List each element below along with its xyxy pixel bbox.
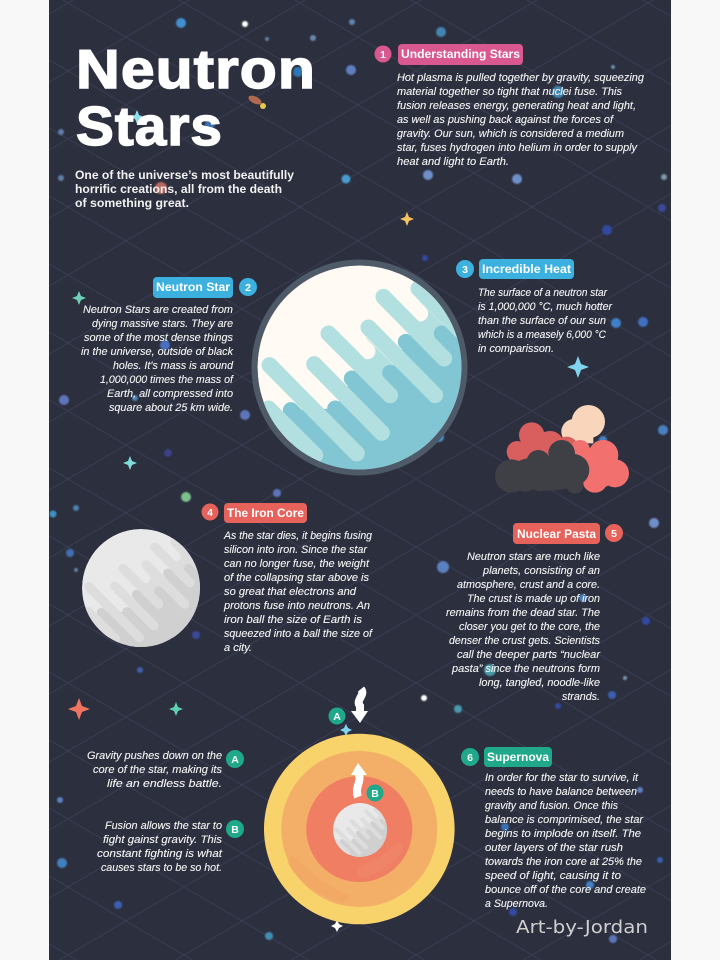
text block: fusion releases energy, generating heat and light, [397,100,636,112]
text block: long, tangled, noodle-like [479,677,600,689]
text block: in the universe, outside of black [81,346,233,358]
text block: Hot plasma is pulled together by gravity, squeezing [397,72,645,84]
text block: The crust is made up of iron [467,593,600,605]
text block: as well as pushing back against the forces of [397,114,614,126]
text block [81,304,234,414]
text block: pasta” since the neutrons form [451,663,600,675]
text block: gravity. Our sun, which is considered a medium [397,128,624,140]
subtitle: horrific creations, all from the death [75,184,282,196]
subtitle: of something great. [75,198,189,210]
illustration: iron core planet [82,529,226,661]
text block: dying massive stars. They are [92,318,233,330]
panel: the iron core [202,503,373,654]
badge B: B [231,824,239,836]
text block [97,820,223,874]
text block: iron ball the size of Earth is [224,614,363,626]
callout A: gravity [87,750,244,790]
badge 2: 2 [245,282,251,294]
text block: strands. [562,691,600,703]
badge A: A [231,754,239,766]
text block: Gravity pushes down on the [87,750,222,762]
arrow: fusion up [351,763,367,797]
heading: neutron star [153,277,233,298]
text block [223,530,373,654]
text block: call the deeper parts “nuclear [457,649,601,661]
text block: In order for the star to survive, it [485,772,639,784]
text block: atmosphere, crust and a core. [457,579,600,591]
text block: denser the crust gets. Scientists [449,635,600,647]
text block: speed of light, causing it to [485,870,621,882]
heading: neutron star: Neutron Star [156,282,231,294]
heading: understanding stars [398,44,523,65]
badge 5 [605,524,623,542]
text block: As the star dies, it begins fusing [223,530,373,542]
badge 3: 3 [462,264,468,276]
marker B [366,784,384,802]
text block: gravity and fusion. Once this [485,800,618,812]
text block: begins to implode on itself. The [485,828,641,840]
badge 3 [456,260,474,278]
text block: The surface of a neutron star [478,287,608,299]
heading: supernova [484,747,552,767]
title: Neutron [76,38,316,100]
panel: supernova [461,747,646,910]
text block: silicon into iron. Since the star [224,544,368,556]
text block: holes. It’s mass is around [113,360,234,372]
heading: incredible heat: Incredible Heat [482,264,571,276]
badge 4 [202,504,218,520]
panel: nuclear pasta [446,523,623,703]
text block: outer layers of the star rush [485,842,623,854]
title: Stars [76,95,223,157]
subtitle: One of the universe’s most beautifully [75,170,295,182]
text block: a Supernova. [485,898,548,910]
text block: life an endless battle. [107,778,222,790]
text block [446,551,601,703]
decorative sparkle stars [68,110,589,932]
icon: comet [247,94,266,109]
text block: of the collapsing star above is [224,572,369,584]
text block [397,72,645,168]
text block: than the surface of our sun [478,315,606,327]
badge A [226,750,244,768]
heading: nuclear pasta [513,523,600,544]
text block: protons fuse into neutrons. An [223,600,370,612]
illustration: neutron star planet [254,262,507,493]
title [76,38,316,157]
marker B: B [371,788,379,800]
text block: fight gainst gravity. This [103,834,223,846]
text block: causes stars to be so hot. [101,862,222,874]
arrow: gravity down [351,689,368,723]
badge B [226,820,244,838]
text block: Fusion allows the star to [105,820,222,832]
text block: heat and light to Earth. [397,156,509,168]
subtitle [75,170,295,210]
text block [478,287,613,355]
illustration: nuclear pasta cloud [495,405,629,494]
heading: nuclear pasta: Nuclear Pasta [517,529,597,541]
text block: is 1,000,000 °C, much hotter [478,301,613,313]
illustration: star layers diagram [264,734,455,924]
text block: squeezed into a ball the size of [224,628,373,640]
text block: remains from the dead star. The [446,607,600,619]
watermark: Art-by-Jordan [516,917,648,938]
text block: star, fuses hydrogen into helium in order to supply [397,142,638,154]
badge 5: 5 [611,528,617,540]
text block: a city. [224,642,252,654]
text block [485,772,646,910]
text block: balance is comprimised, the star [485,814,644,826]
callout B: fusion [97,820,244,874]
text block: towards the iron core at 25% the [485,856,642,868]
text block: Neutron stars are much like [467,551,600,563]
heading: supernova: Supernova [487,752,550,764]
marker A: A [333,711,341,723]
text block: needs to have balance between [485,786,637,798]
badge 1: 1 [380,49,386,61]
text block: constant fighting is what [97,848,223,860]
text block: Neutron Stars are created from [83,304,233,316]
marker A [328,708,346,724]
text block: which is a measely 6,000 °C [478,329,606,341]
text block: planets, consisting of an [482,565,600,577]
badge 6 [461,748,479,766]
heading: the iron core [224,503,307,523]
text block: closer you get to the core, the [459,621,600,633]
heading: incredible heat [479,259,574,279]
badge 1 [374,46,392,62]
text block: Earth, all compressed into [107,388,233,400]
text block: core of the star, making its [93,764,223,776]
text block: 1,000,000 times the mass of [100,374,234,386]
heading: the iron core: The Iron Core [227,508,304,520]
text block: can no longer fuse, the weight [224,558,370,570]
heading: understanding stars: Understanding Stars [401,49,520,61]
badge 2 [239,278,257,296]
badge 4: 4 [207,507,213,519]
text block: in comparisson. [478,343,554,355]
text block [87,750,223,790]
text block: some of the most dense things [84,332,233,344]
text block: so great that electrons and [224,586,357,598]
badge 6: 6 [467,752,473,764]
panel: understanding stars [374,44,645,168]
text block: square about 25 km wide. [109,402,233,414]
text block: material together so tight that nuclei fuse. This [397,86,622,98]
panel: neutron star [81,277,257,414]
text block: bounce off of the core and create [485,884,646,896]
panel: incredible heat [456,259,613,355]
